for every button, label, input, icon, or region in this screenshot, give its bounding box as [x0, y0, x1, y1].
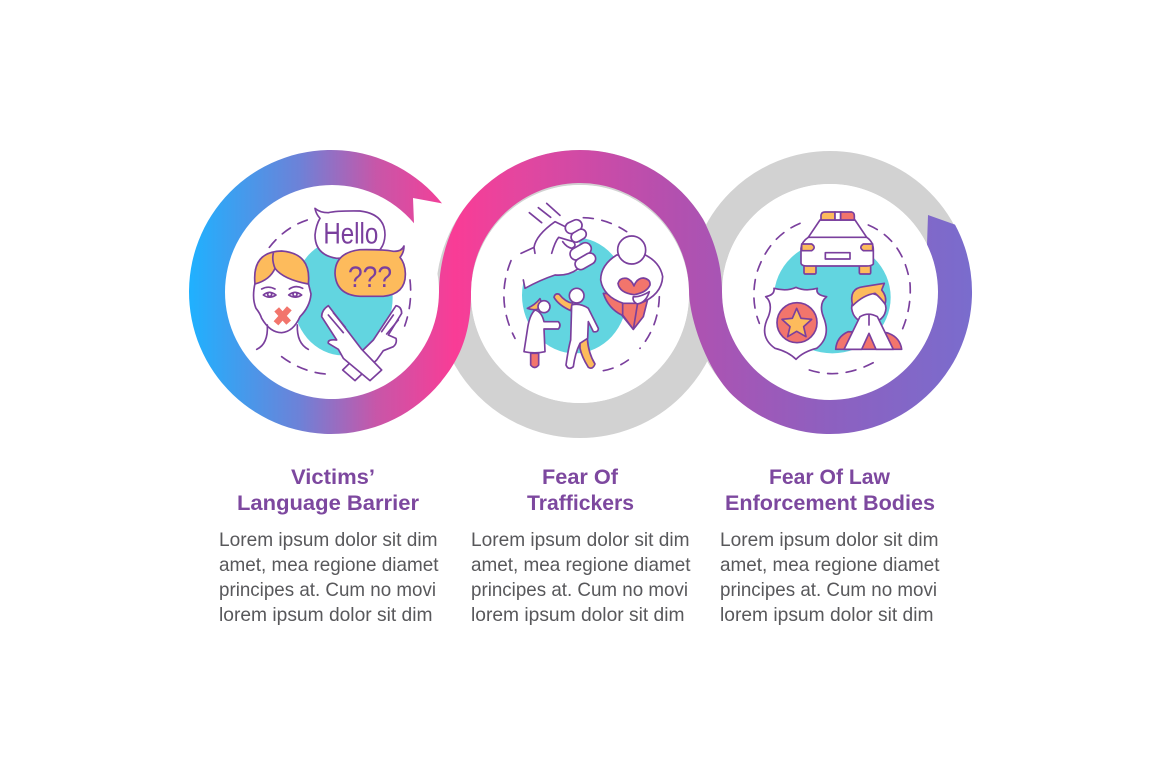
motion lines [529, 203, 560, 223]
text block: column 1: principes at. Cum no movi [219, 579, 436, 601]
crying person [836, 283, 902, 349]
heading: Fear Of Law Enforcement Bodies: Enforcement Bodies [725, 492, 935, 515]
text block: column 2: principes at. Cum no movi [471, 579, 688, 601]
text block: column 2: Lorem ipsum dolor sit dim [471, 529, 690, 551]
heading: Fear Of Law Enforcement Bodies: Fear Of Law [769, 466, 891, 489]
dashed ring [504, 218, 659, 371]
speech bubble: Hello: Hello [323, 217, 378, 250]
grey ring: circle 3 [706, 168, 954, 416]
heading: Victims' Language Barrier: Victims’ [291, 466, 375, 489]
gradient ribbon with arrow ends [189, 150, 972, 434]
police badge [765, 287, 827, 359]
fist [521, 218, 598, 288]
dashed ring [754, 223, 910, 374]
text block: column 1: amet, mea regione diamet [219, 554, 439, 576]
icon: language barrier [254, 208, 411, 381]
icon: fear of traffickers [504, 203, 663, 371]
text block: column 2: amet, mea regione diamet [471, 554, 691, 576]
text block: column 1: Lorem ipsum dolor sit dim [219, 529, 438, 551]
text block: column 3: amet, mea regione diamet [720, 554, 940, 576]
girl figure [524, 299, 560, 367]
dashed ring [269, 220, 411, 374]
speech bubble: Hello [315, 208, 385, 258]
text block: column 3: Lorem ipsum dolor sit dim [720, 529, 938, 551]
mother with child [601, 236, 663, 329]
text block: column 2: lorem ipsum dolor sit dim [471, 604, 684, 626]
speech bubble: question marks: ??? [348, 261, 392, 294]
white disks [225, 184, 938, 403]
crossed arms [322, 306, 402, 381]
heading: Victims' Language Barrier [237, 466, 419, 515]
text block: column 3: principes at. Cum no movi [720, 579, 937, 601]
adult figure [554, 288, 598, 368]
face [254, 251, 311, 349]
teal blob [774, 241, 891, 353]
heading: Fear Of Traffickers [527, 466, 634, 515]
heading: Fear Of Traffickers: Traffickers [527, 492, 634, 515]
heading: Fear Of Law Enforcement Bodies [725, 466, 935, 515]
grey ring: circle 2 [454, 168, 706, 420]
text block: column 1 [219, 529, 439, 626]
text block: column 3: lorem ipsum dolor sit dim [720, 604, 934, 626]
text block: column 2 [471, 529, 691, 626]
heading: Fear Of Traffickers: Fear Of [542, 466, 619, 489]
mouth tape [276, 308, 289, 323]
police car [801, 212, 873, 274]
speech bubble: question marks [335, 246, 405, 296]
text block: column 3 [720, 529, 940, 626]
teal blob [293, 239, 393, 355]
icon: fear of law enforcement [754, 212, 910, 374]
heading: Victims' Language Barrier: Language Barrier [237, 492, 419, 515]
text block: column 1: lorem ipsum dolor sit dim [219, 604, 432, 626]
teal blob [522, 237, 627, 353]
